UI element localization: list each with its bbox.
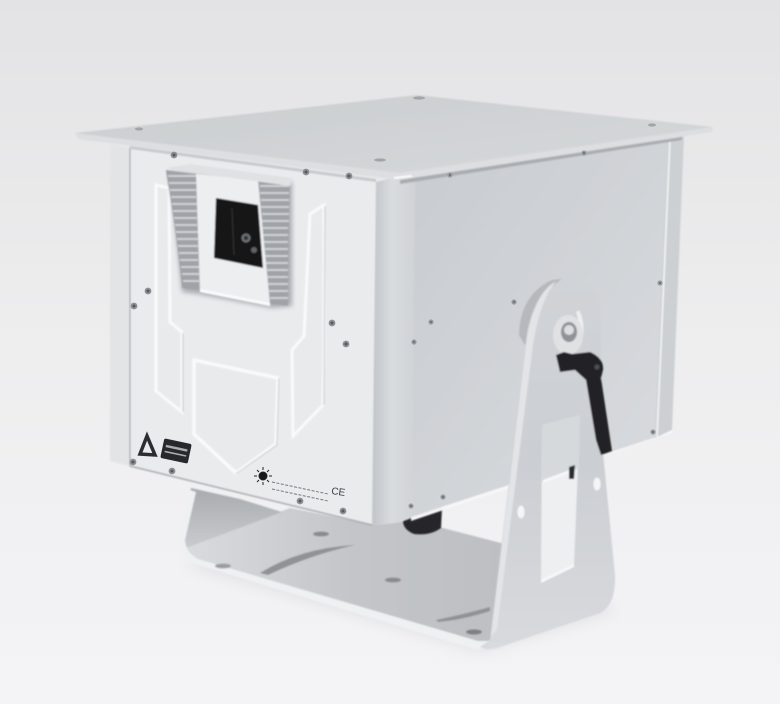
bracket upright [480,279,615,649]
top plate holes [135,96,656,162]
heat sink recess shadow [170,172,292,308]
pivot washer [553,315,583,355]
warning text lines [272,482,328,501]
front panel relief: shield [194,360,278,473]
top plate edge [75,127,713,180]
front panel relief: left channel [156,185,182,412]
heat sink fins [168,176,289,298]
side panel [411,139,670,517]
front panel [130,147,376,525]
bracket floor plate [183,508,520,644]
lens window [214,198,263,268]
pivot bolt [561,322,577,342]
floor slots and holes [215,532,490,635]
panel screws [130,150,663,514]
pivot rim [519,279,562,350]
right side strip [655,136,684,438]
small dark stud in window [569,465,575,479]
shadow under top plate [400,137,682,184]
laser warning triangle [140,436,155,455]
projector housing [75,95,713,525]
heat sink left [166,170,199,290]
laser label plate [160,438,192,464]
corner post [372,172,415,525]
bracket back wall [180,488,282,548]
front panel relief: right channel [292,205,324,436]
floor shadow [185,520,620,652]
locking handle [556,352,612,455]
lens housing [196,174,270,304]
laser aperture icon [254,467,272,485]
upright holes [517,506,525,518]
top plate [75,95,713,173]
upright window view [541,415,580,582]
heat sink right [258,180,290,306]
CE mark: CE [331,486,346,499]
upright plate [480,279,615,649]
plate bevel highlight [491,281,556,636]
left side strip [110,145,130,466]
mounting bracket base [178,488,520,649]
pivot slot [574,310,584,346]
bracket lit edge [178,490,494,649]
rubber foot [403,508,442,534]
